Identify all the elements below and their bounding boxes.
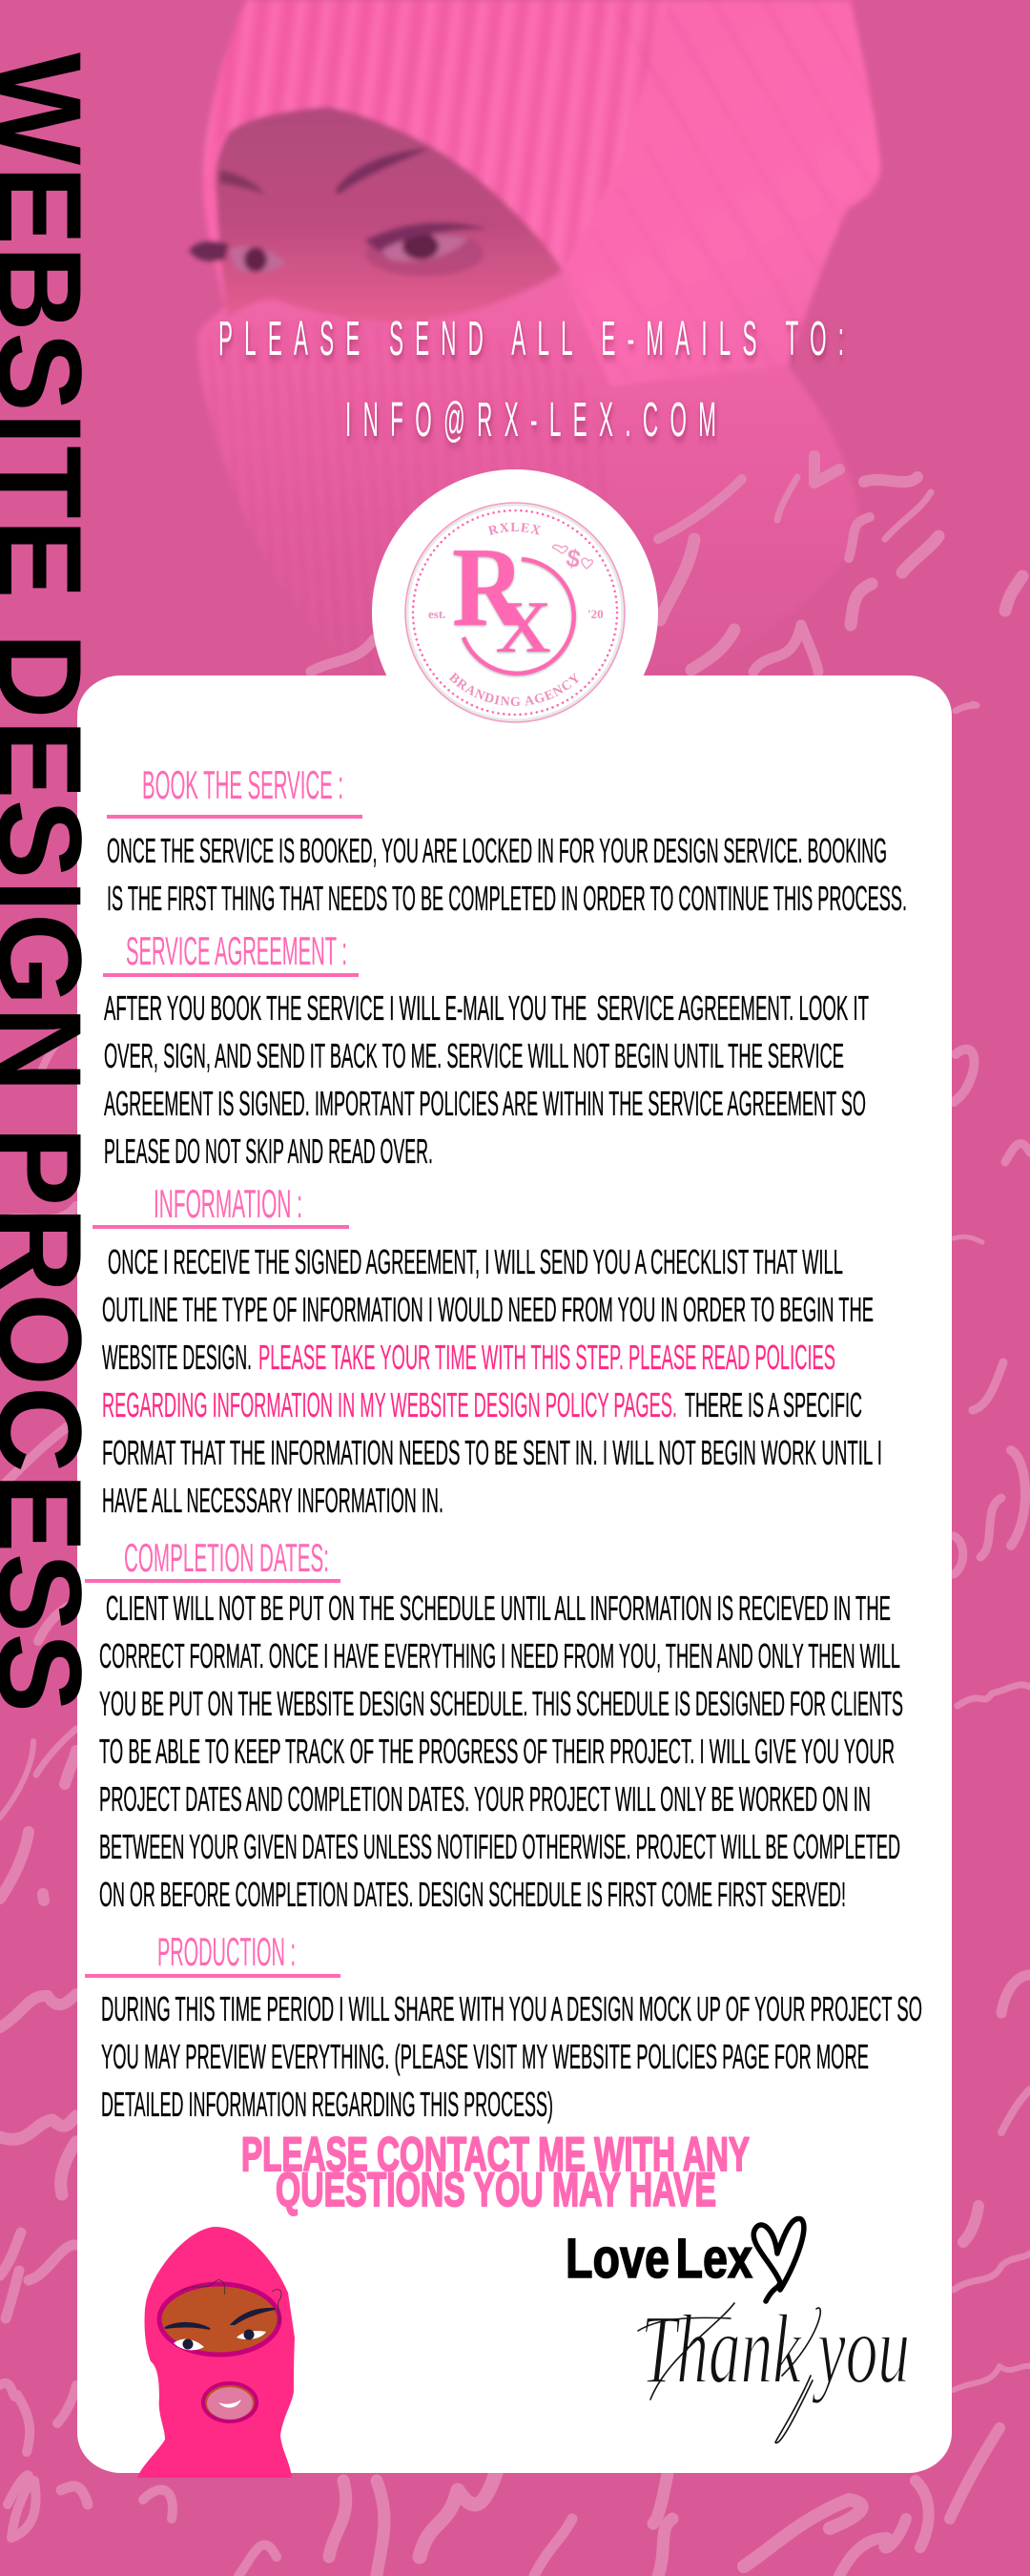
eye right: [381, 235, 467, 261]
brow right: [335, 148, 431, 195]
Rx monogram: [452, 524, 551, 675]
icon: hearts and dollar doodle: $: [564, 543, 584, 574]
section: completion dates: COMPLETION DATES:: [124, 1535, 329, 1580]
hood brim ribs: [203, 0, 668, 271]
dotted ring: [413, 510, 617, 715]
curls: [181, 2280, 281, 2324]
section: service agreement: [103, 928, 869, 1171]
body text: DETAILED INFORMATION REGARDING THIS PROCESS): [101, 2085, 553, 2124]
logo: Rx branding agency badge: [404, 502, 626, 723]
section: production: PRODUCTION :: [157, 1929, 296, 1974]
brow left: [219, 170, 265, 195]
mascot: pink ski-mask character: [137, 2227, 295, 2478]
collar ribbing: [197, 320, 620, 675]
eye left: [229, 246, 286, 272]
panel: white process card: [77, 675, 952, 2473]
badge outer rings: [406, 504, 624, 721]
section: book the service: [107, 762, 907, 918]
body text: [107, 831, 907, 918]
body text: WEBSITE DESIGN.: [102, 1338, 252, 1377]
email line 1: PLEASE SEND ALL E-MAILS TO:: [218, 312, 844, 366]
section: information: [93, 1181, 882, 1520]
eye shadow right: [365, 231, 484, 277]
logo white circle backing: [372, 469, 658, 756]
body text: THERE IS A SPECIFIC: [685, 1385, 862, 1424]
contact call to action: [241, 2128, 750, 2216]
body text: [102, 1242, 882, 1520]
section: book the service: BOOK THE SERVICE :: [142, 762, 343, 807]
body text: PLEASE DO NOT SKIP AND READ OVER.: [104, 1132, 433, 1171]
balaclava hood: [203, 0, 880, 386]
contact call to action: QUESTIONS YOU MAY HAVE: [276, 2163, 716, 2216]
section: production: [85, 1929, 922, 2124]
badge captions: RXLEX: [487, 523, 542, 535]
contact call to action: PLEASE CONTACT ME WITH ANY: [241, 2128, 750, 2181]
email line 2: INFO@RX-LEX.COM: [345, 393, 716, 447]
eyebrows: [165, 2323, 210, 2329]
badge captions: est.: [428, 607, 445, 621]
body text: HAVE ALL NECESSARY INFORMATION IN.: [102, 1481, 443, 1520]
body text: [104, 988, 869, 1171]
lashes left: [189, 241, 229, 261]
Rx monogram: x: [496, 558, 551, 675]
mascot mask body: [137, 2227, 295, 2478]
section: service agreement: SERVICE AGREEMENT :: [126, 928, 347, 973]
body text: [101, 1989, 922, 2124]
arc ring of the Rx: [464, 559, 574, 674]
love lex sign-off: Love Lex: [566, 2228, 752, 2290]
photo: woman in pink knit balaclava: [189, 0, 880, 679]
badge captions: '20: [587, 607, 604, 621]
signature flourish: [638, 2303, 820, 2443]
balaclava lower mask and collar: [197, 191, 860, 679]
face opening: [159, 2284, 279, 2355]
badge captions: BRANDING AGENCY: [448, 672, 580, 706]
section: information: INFORMATION :: [154, 1181, 302, 1226]
face opening: [216, 107, 563, 322]
body text: [99, 1589, 903, 1914]
mouth opening: [203, 2383, 257, 2421]
card background: [77, 675, 952, 2473]
upper lash line right: [364, 222, 488, 252]
Rx monogram: R: [452, 524, 525, 650]
knit diagonal ribs on hood: [563, 0, 880, 382]
badge captions: [428, 523, 604, 706]
icon: heart: [753, 2218, 804, 2301]
email heading: [218, 312, 844, 447]
section: completion dates: [85, 1535, 903, 1914]
thank you signature: [638, 2295, 910, 2443]
icon: hearts and dollar doodle: [552, 543, 592, 574]
eyes: [174, 2339, 204, 2350]
